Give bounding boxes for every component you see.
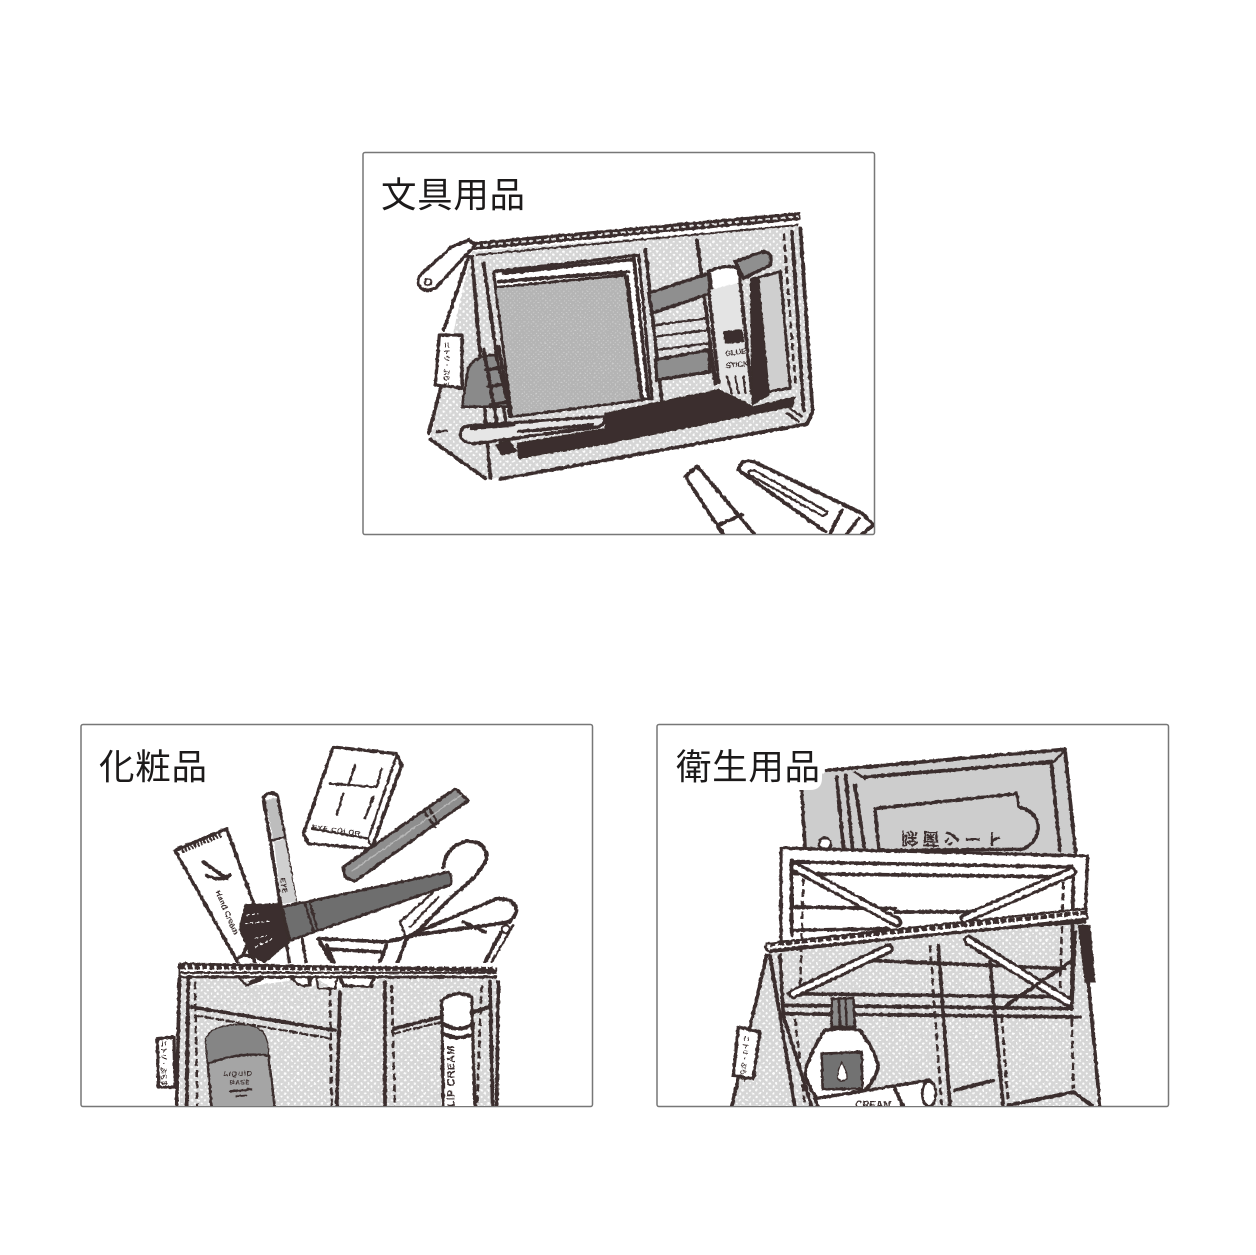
heading: cosmetics: 化粧品 <box>99 747 207 787</box>
zipper pull <box>418 240 475 290</box>
makeup brush <box>239 872 452 963</box>
tag <box>435 335 462 388</box>
wet wipes packet <box>802 749 1076 854</box>
eye drop bottle <box>805 998 878 1100</box>
dark pouch bottom shadow <box>517 389 795 458</box>
glue stick <box>709 266 752 393</box>
glue stick: GLUE <box>725 347 747 358</box>
eye pencil <box>263 793 310 987</box>
illustration: hygiene pouch with contents <box>730 749 1100 1111</box>
marker in pouch <box>460 416 606 445</box>
label backing <box>658 726 822 790</box>
lip cream stick <box>442 994 475 1109</box>
tag <box>733 1027 760 1082</box>
zipper <box>766 909 1088 952</box>
panel: hygiene <box>657 724 1168 1111</box>
items peeking below zipper <box>240 979 373 989</box>
zipper <box>474 216 800 255</box>
lip cream stick: LIP CREAM <box>446 1046 458 1107</box>
liquid base bottle: LIQUID <box>223 1071 253 1078</box>
panel: cosmetics <box>81 724 592 1109</box>
crossing straps below <box>782 940 1080 1107</box>
eye colour palette <box>303 747 402 849</box>
tag: ニトリ・ぷらす <box>443 342 451 388</box>
tag <box>157 1037 175 1087</box>
loose marker with clip <box>739 461 874 534</box>
pouch side lines <box>732 929 1100 1107</box>
heading: hygiene: 衛生用品 <box>676 747 820 787</box>
eyelash curler <box>318 841 517 989</box>
tag: ニトリ・ぷらす <box>160 1040 168 1087</box>
lower pen <box>655 350 710 380</box>
notebook <box>494 255 652 417</box>
eye pencil: EYE <box>278 877 289 894</box>
liquid base bottle: BASE <box>230 1080 250 1087</box>
glue stick: STICK <box>725 359 750 370</box>
eye colour palette: EYE COLOR <box>311 822 361 838</box>
pouch body <box>180 979 497 1109</box>
hand cream tube <box>175 829 260 985</box>
cream tube <box>815 1080 1092 1111</box>
zipper <box>179 963 497 978</box>
heading: stationery: 文具用品 <box>381 175 525 215</box>
wet wipes packet: 除菌シート <box>901 829 1003 849</box>
hand cream tube: Hand Cream <box>213 889 241 936</box>
illustration: cosmetics pouch with contents <box>157 747 517 1109</box>
loose pen tip <box>685 466 754 535</box>
mascara <box>343 789 468 881</box>
liquid base bottle <box>206 1025 275 1109</box>
pouch body <box>430 225 813 478</box>
illustration: stationery pouch with contents <box>418 216 874 535</box>
tag: ニトリ・ぷらす <box>738 1035 750 1082</box>
pouch body mesh <box>730 922 1100 1109</box>
ruler <box>755 272 790 392</box>
pen behind notebook <box>649 273 710 313</box>
brush head at left <box>462 355 509 407</box>
mask envelope <box>781 848 1088 1005</box>
panel: stationery <box>363 152 874 535</box>
cream tube: CREAM <box>855 1100 892 1111</box>
